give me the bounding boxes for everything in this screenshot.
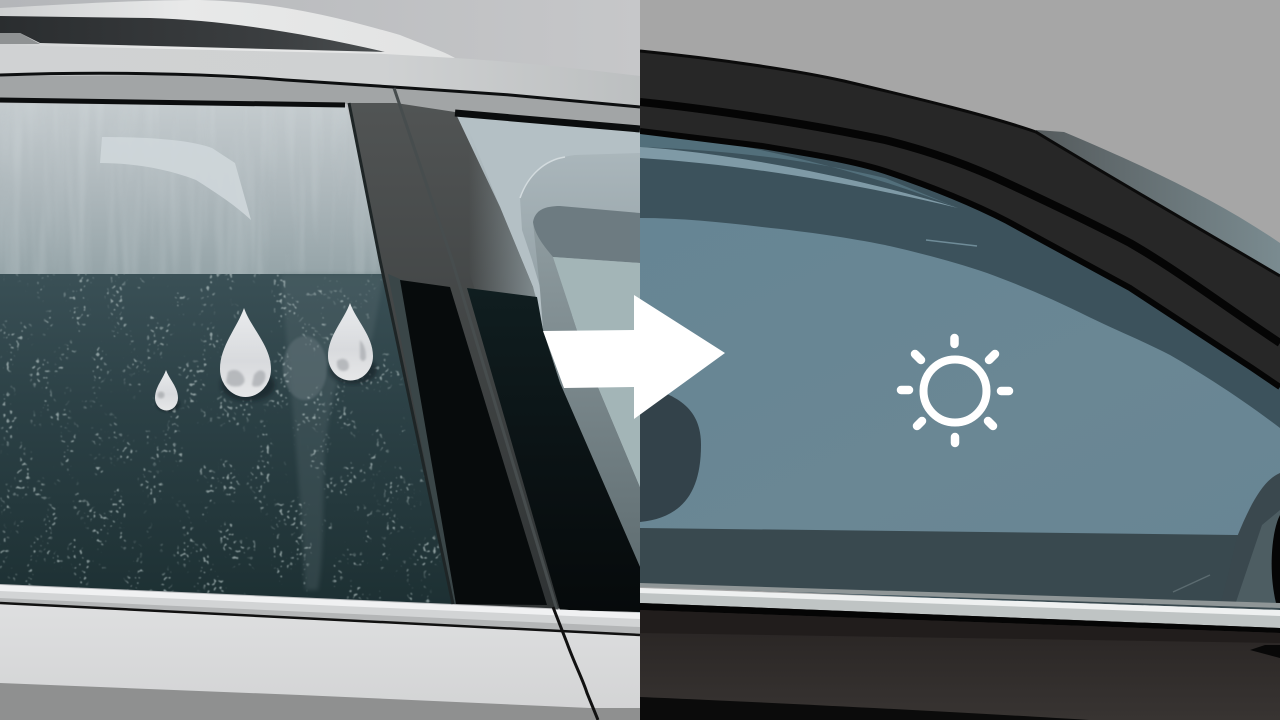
main light glass [640, 218, 1280, 540]
second black line right [455, 113, 640, 129]
roof panel [0, 45, 640, 108]
water specks [0, 270, 460, 610]
door dark spot [1250, 645, 1280, 658]
streaks on upper glass [10, 214, 363, 274]
headrest ghost in glass [283, 336, 327, 400]
arrow: before to after [543, 295, 725, 419]
interior faint line [1173, 575, 1210, 592]
roof rail foot [0, 33, 40, 44]
black window frame [640, 50, 1280, 400]
chrome highlight [640, 588, 1280, 616]
black door strip [640, 603, 1280, 633]
door lower shade [0, 683, 640, 720]
icon: sun [901, 338, 1009, 443]
rear seat shape [520, 153, 640, 306]
seat rim highlight [520, 157, 565, 198]
second black line left [0, 100, 345, 105]
reflection [100, 137, 251, 220]
glass top band [640, 132, 958, 208]
rear glass [455, 112, 640, 620]
mirror inner [1235, 510, 1280, 608]
door seam [553, 607, 598, 720]
chrome mid tone [0, 591, 640, 627]
glass reflection strip [640, 147, 958, 208]
icon: right water drop [328, 303, 377, 384]
seat dark band [533, 206, 640, 263]
mirror [1220, 473, 1280, 608]
icon: large water drop [220, 308, 275, 401]
main wet glass lower [0, 274, 453, 604]
door shadow band [640, 610, 1280, 643]
roof black line [0, 73, 640, 107]
icon: small water drop [155, 370, 180, 412]
chrome highlight [0, 585, 640, 619]
lower left black panel [400, 280, 547, 605]
panel: before, wet window on silver car [0, 0, 640, 720]
lower interior band [640, 528, 1280, 612]
roof tip behind frame [1036, 130, 1280, 285]
pillar [349, 103, 640, 612]
lower left pillar body [388, 274, 456, 604]
window frame strip [0, 75, 640, 128]
lower right black panel [467, 288, 640, 612]
chrome edge line [0, 603, 640, 635]
roof rail [0, 0, 454, 58]
small reflection line [926, 240, 977, 246]
door [0, 604, 640, 708]
tinted glass dark band [640, 130, 1280, 612]
pillar seam [394, 88, 557, 610]
frame top edge [640, 51, 1280, 276]
mirror black recess [1272, 515, 1280, 604]
black door [640, 603, 1280, 720]
pillar right sheen [476, 161, 536, 297]
chrome thin strip [640, 583, 1280, 608]
roof rail slot [0, 16, 385, 52]
window edge line [349, 103, 453, 604]
door bottom shadow [640, 697, 1089, 720]
frame groove one [640, 102, 1280, 343]
rear teal panel [553, 257, 640, 487]
chrome strip [640, 588, 1280, 628]
panel: after, clear tinted window on black car [640, 0, 1280, 720]
main wet glass upper [0, 103, 388, 276]
headrest [640, 385, 701, 522]
chrome strip [242, 609, 640, 634]
seat side strip [533, 222, 640, 575]
frame groove two [640, 131, 1280, 387]
interior seat shadow [281, 274, 384, 590]
